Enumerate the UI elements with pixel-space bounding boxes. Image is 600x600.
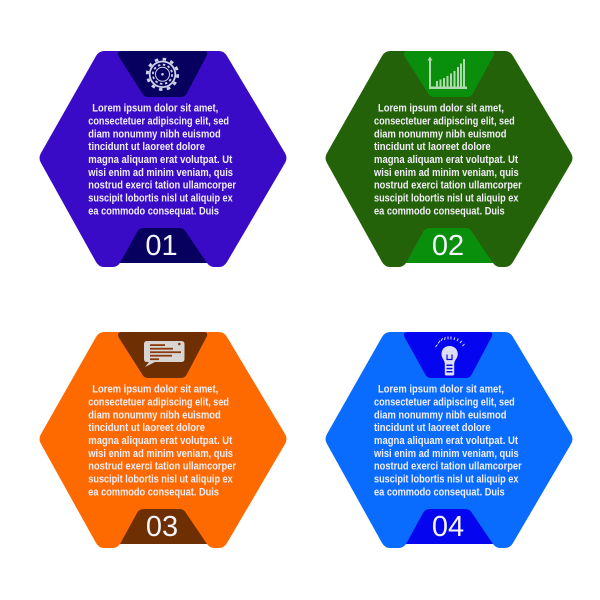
body text 04: magna aliquam erat volutpat. Ut [374, 435, 518, 447]
body text 02: Lorem ipsum dolor sit amet, [378, 103, 504, 115]
body text 04: ea commodo consequat. Duis [374, 486, 505, 498]
bottom tab 03 [120, 509, 207, 544]
body text 02: tincidunt ut laoreet dolore [374, 141, 491, 153]
body text 01: magna aliquam erat volutpat. Ut [88, 154, 233, 166]
body text 03: Lorem ipsum dolor sit amet, [92, 384, 218, 396]
body text 01: suscipit lobortis nisl ut aliquip ex [88, 192, 233, 204]
icon: speech bubble [144, 341, 184, 367]
panel: 02 green hexagon [326, 51, 572, 267]
body text 04 [373, 384, 522, 498]
body text 03: nostrud exerci tation ullamcorper [88, 461, 237, 473]
body text 02: wisi enim ad minim veniam, quis [373, 167, 519, 179]
body text 01: diam nonummy nibh euismod [88, 128, 221, 140]
body text 02 [373, 103, 522, 217]
body text 01: ea commodo consequat. Duis [88, 205, 219, 217]
body text 02: consectetuer adipiscing elit, sed [374, 116, 515, 128]
top tab 02 [404, 51, 494, 97]
bottom tab 04 [406, 509, 493, 544]
hexagon background 01 [40, 51, 286, 267]
body text 03: diam nonummy nibh euismod [88, 409, 221, 421]
icon: light bulb [436, 336, 464, 376]
body text 03: magna aliquam erat volutpat. Ut [88, 435, 233, 447]
body text 03: tincidunt ut laoreet dolore [88, 422, 205, 434]
body text 01: nostrud exerci tation ullamcorper [88, 180, 237, 192]
hexagon background 04 [326, 332, 572, 548]
body text 03 [87, 384, 237, 498]
number 04: 04 [432, 511, 464, 543]
bottom tab 02 [406, 228, 493, 263]
body text 03: consectetuer adipiscing elit, sed [88, 396, 229, 408]
body text 01: consectetuer adipiscing elit, sed [88, 116, 229, 128]
body text 04: tincidunt ut laoreet dolore [374, 422, 491, 434]
body text 03: suscipit lobortis nisl ut aliquip ex [88, 474, 233, 486]
panel: 03 orange hexagon [40, 332, 286, 548]
hexagon background 02 [326, 51, 572, 267]
body text 03: ea commodo consequat. Duis [88, 486, 219, 498]
number 02: 02 [432, 230, 464, 262]
number 01: 01 [145, 230, 178, 262]
body text 04: Lorem ipsum dolor sit amet, [378, 384, 504, 396]
body text 01 [87, 103, 237, 217]
body text 02: magna aliquam erat volutpat. Ut [374, 154, 518, 166]
body text 02: ea commodo consequat. Duis [374, 205, 505, 217]
panel: 01 purple hexagon [40, 51, 286, 267]
body text 04: consectetuer adipiscing elit, sed [374, 396, 515, 408]
number 03: 03 [146, 511, 178, 543]
body text 04: nostrud exerci tation ullamcorper [374, 461, 522, 473]
hexagon background 03 [40, 332, 286, 548]
bottom tab 01 [120, 228, 207, 263]
panel: 04 blue hexagon [326, 332, 572, 548]
body text 01: wisi enim ad minim veniam, quis [87, 167, 233, 179]
top tab 01 [118, 51, 207, 97]
icon: gear [147, 59, 178, 90]
body text 02: diam nonummy nibh euismod [374, 128, 506, 140]
body text 02: nostrud exerci tation ullamcorper [374, 180, 522, 192]
body text 04: diam nonummy nibh euismod [374, 409, 506, 421]
icon: bar chart [428, 56, 467, 89]
body text 01: tincidunt ut laoreet dolore [88, 141, 205, 153]
body text 04: suscipit lobortis nisl ut aliquip ex [374, 474, 519, 486]
body text 03: wisi enim ad minim veniam, quis [87, 448, 233, 460]
body text 01: Lorem ipsum dolor sit amet, [92, 103, 218, 115]
top tab 04 [404, 332, 492, 378]
body text 04: wisi enim ad minim veniam, quis [373, 448, 519, 460]
body text 02: suscipit lobortis nisl ut aliquip ex [374, 192, 519, 204]
top tab 03 [118, 332, 207, 378]
